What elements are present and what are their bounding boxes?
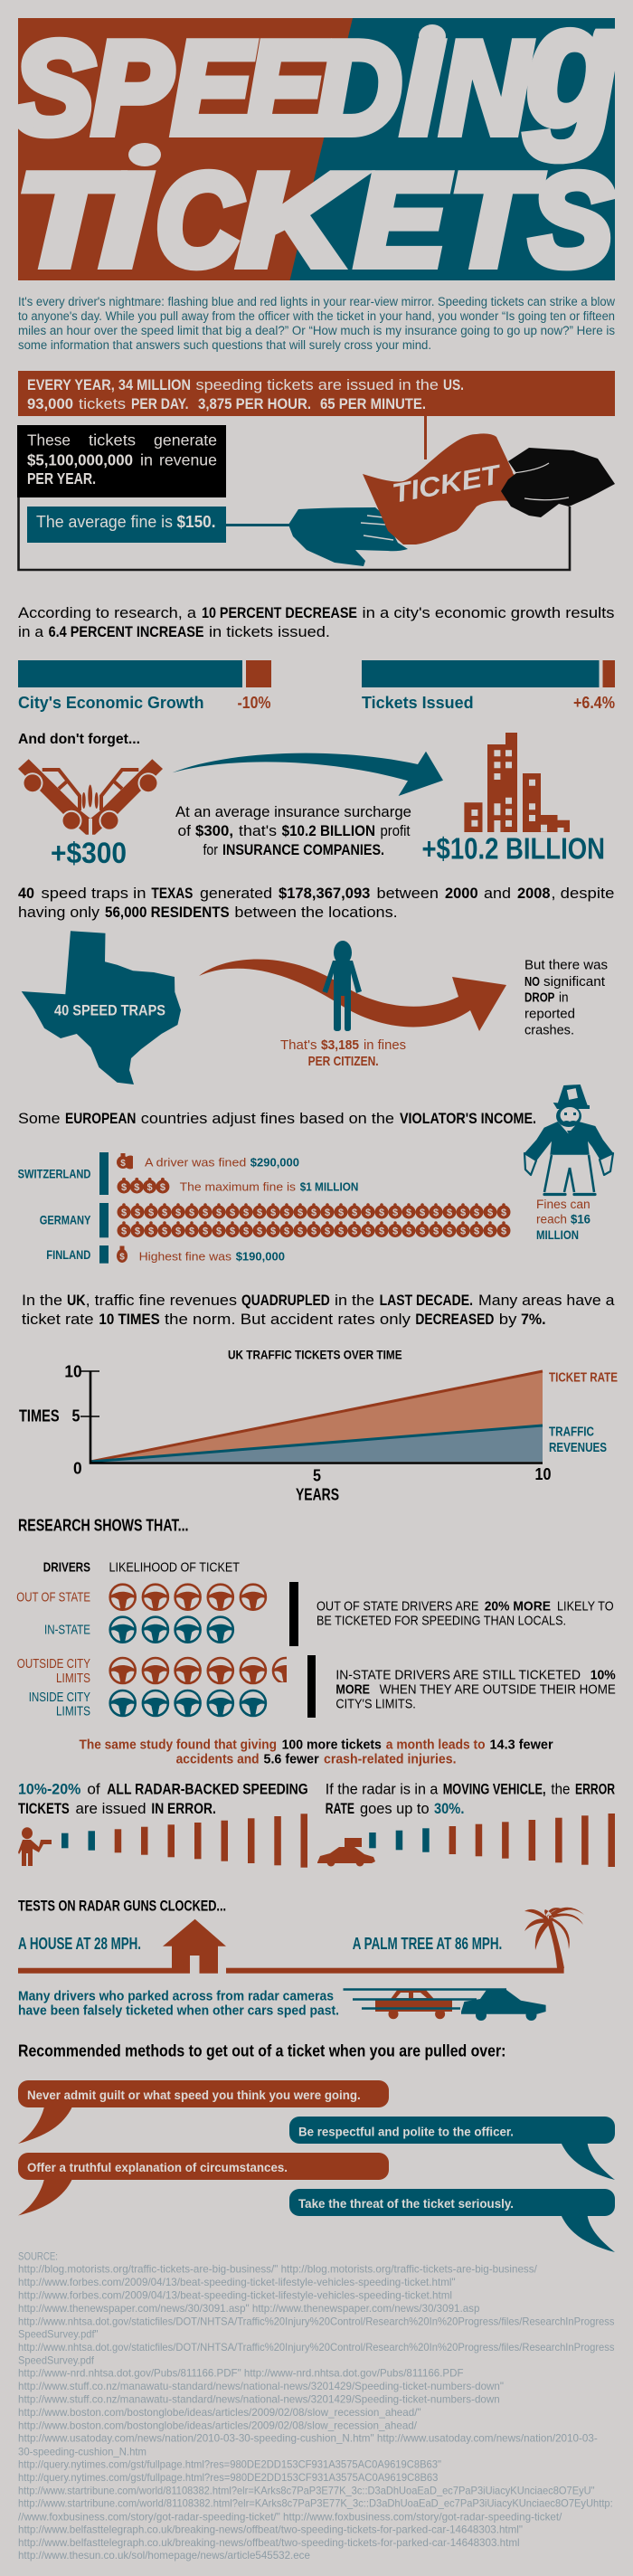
callout: same study: The same study found that giving <box>80 1738 277 1752</box>
stat bar: 34 million tickets: 65 PER MINUTE. <box>320 395 426 412</box>
revenue box: PER YEAR. <box>27 469 96 488</box>
uk statement: 7%. <box>521 1311 546 1328</box>
source list: http://www.usatoday.com/news/nation/2010-03-30-speeding-cushion_N.htm" http://www.usatoday.com/news/nation/2010-03- <box>18 2432 598 2445</box>
texas statement: speed traps in <box>42 885 146 902</box>
source list: http://www.belfasttelegraph.co.uk/breaking-news/offbeat/two-speeding-tickets-for-parked-car-14648303.html <box>18 2536 520 2549</box>
outline frame around revenue boxes <box>18 497 570 570</box>
title banner: E <box>172 14 255 161</box>
texas statement: $178,367,093 <box>279 885 370 902</box>
note: in-state drivers: 10% <box>590 1668 616 1683</box>
source list: http://www.thenewspaper.com/news/30/3091.asp" http://www.thenewspaper.com/news/30/3091.asp <box>18 2302 480 2315</box>
source list: http://query.nytimes.com/gst/fullpage.html?res=980DE2DD153CF931A3575AC0A9619C8B63 <box>18 2471 439 2484</box>
note: fines can reach $16 million: $16 <box>571 1213 590 1226</box>
insurance text: At an average insurance surcharge <box>175 803 411 820</box>
title banner: D <box>316 14 402 161</box>
note: out of state drivers: BE TICKETED FOR SPEEDING THAN LOCALS. <box>316 1614 566 1629</box>
speech bubble: take the threat seriously <box>289 2189 615 2252</box>
source list: http://www.stuff.co.nz/manawatu-standard/news/national-news/3201429/Speeding-ticket-numbers-down" <box>18 2380 504 2392</box>
title banner: N <box>440 14 532 161</box>
label: switzerland: A driver was fined <box>145 1155 246 1169</box>
label: switzerland: SWITZERLAND <box>18 1167 90 1181</box>
note: out of state drivers <box>289 1582 614 1646</box>
icon: citizen figure <box>322 941 362 1031</box>
source list: http://www.startribune.com/world/81108382.html?elr=KArks8c7PaP3E77K_3c::D3aDhUoaEaD_ec7PaP3iUiacyKUnciaec8O7EyU" <box>18 2484 595 2496</box>
heading: and don't forget: And don't forget... <box>18 732 140 747</box>
title banner: K <box>238 147 361 293</box>
note: in-state drivers: CITY'S LIMITS. <box>335 1697 416 1712</box>
title banner: I <box>402 14 442 161</box>
callout: same study: a month leads to <box>386 1738 486 1752</box>
intro paragraph: to anyone's day. While you pull away from the officer with the ticket in your hand, you wonder “Is going ten or fifteen <box>18 309 615 323</box>
stat bar: 34 million tickets: speeding tickets are issued in the <box>195 376 439 393</box>
pictogram chart: likelihood of ticket: INSIDE CITY <box>29 1690 90 1705</box>
radar error statement <box>18 1780 308 1817</box>
falsely ticketed text <box>18 1989 339 2019</box>
source list: http://www.stuff.co.nz/manawatu-standard/news/national-news/3201429/Speeding-ticket-numbers-down <box>18 2393 500 2406</box>
uk statement: ticket rate <box>22 1311 94 1328</box>
label: germany <box>40 1203 520 1237</box>
pictogram chart: likelihood of ticket: OUT OF STATE <box>16 1590 90 1605</box>
note: in-state drivers: IN-STATE DRIVERS ARE STILL TICKETED <box>335 1668 581 1683</box>
area chart: uk traffic tickets over time: TICKET RATE <box>549 1370 618 1385</box>
note: fines can reach $16 million: Fines can <box>536 1198 590 1211</box>
title banner: I <box>101 147 149 293</box>
research statement: 10 PERCENT DECREASE <box>202 604 357 621</box>
uk statement: LAST DECADE. <box>380 1292 473 1309</box>
insurance text: of <box>177 822 191 839</box>
source list: SpeedSurvey.pdf" <box>18 2328 98 2341</box>
label: switzerland: $$$$ <box>121 1182 165 1193</box>
icon: texas map <box>22 931 181 1084</box>
speech bubble: truthful explanation <box>18 2153 389 2216</box>
icon: ticket <box>363 433 527 545</box>
callout: same study: crash-related injuries. <box>324 1752 456 1766</box>
source list: http://www-nrd.nhtsa.dot.gov/Pubs/811166.PDF" http://www-nrd.nhtsa.dot.gov/Pubs/811166.PDF <box>18 2367 463 2380</box>
uk statement: , traffic fine revenues <box>86 1292 237 1309</box>
icon: engine <box>18 759 163 835</box>
texas statement: and <box>484 885 511 902</box>
insurance text <box>175 803 411 858</box>
connector: fine box to hand <box>226 524 291 526</box>
crash drop note <box>524 958 608 1038</box>
icon: black hand holding ticket <box>501 448 615 517</box>
per citizen text: in fines <box>364 1037 406 1053</box>
title banner: P <box>92 14 172 161</box>
icon: ticket: TICKET <box>390 459 505 509</box>
average fine box: The average fine is <box>36 512 173 531</box>
pictogram chart: likelihood of ticket: LIMITS <box>56 1671 90 1686</box>
per citizen text: PER CITIZEN. <box>308 1054 379 1069</box>
crash drop note: But there was <box>524 958 608 973</box>
crash drop note: in <box>559 990 569 1006</box>
callout: same study: 14.3 fewer <box>490 1738 553 1752</box>
label: a palm tree at 86 mph: A PALM TREE AT 86 MPH. <box>353 1935 502 1953</box>
uk statement: DECREASED <box>415 1311 494 1328</box>
source list: SpeedSurvey.pdf <box>18 2353 95 2366</box>
pictogram chart: likelihood of ticket: LIMITS <box>56 1704 90 1719</box>
source list: http://www.boston.com/bostonglobe/ideas/articles/2009/02/08/slow_recession_ahead/" <box>18 2406 421 2419</box>
intro paragraph: some information that answers such questions that will surely cross your mind. <box>18 338 431 352</box>
label: switzerland: The maximum fine is <box>180 1179 297 1193</box>
radar error statement: of <box>87 1780 100 1797</box>
note: out of state drivers: OUT OF STATE DRIVERS ARE <box>316 1599 479 1615</box>
research statement: in a city's economic growth results <box>362 604 615 621</box>
title banner: E <box>246 14 327 161</box>
title banner: S <box>530 147 613 293</box>
radar bars: moving vehicle <box>369 1814 615 1867</box>
bar: city's economic growth: City's Economic Growth <box>18 694 204 712</box>
falsely ticketed text: Many drivers who parked across from radar cameras <box>18 1989 334 2004</box>
moving vehicle statement: ERROR <box>575 1780 615 1797</box>
research statement <box>18 604 615 640</box>
icon: officer with radar gun <box>18 1827 52 1866</box>
revenue box: generate <box>154 431 217 450</box>
source list: SOURCE: <box>18 2250 58 2263</box>
research statement: 6.4 PERCENT INCREASE <box>49 623 204 640</box>
label: germany: $$$$$$$$$$$$$$$$$$$$$$$$$$$$$$ <box>121 1208 520 1218</box>
pictogram chart: likelihood of ticket: DRIVERS <box>43 1560 90 1576</box>
uk statement: 10 TIMES <box>99 1311 160 1328</box>
source list: http://www.forbes.com/2009/04/13/beat-speeding-ticket-lifestyle-vehicles-speeding-ticket.html" <box>18 2276 456 2288</box>
icon: teal hand receiving ticket <box>288 507 408 566</box>
label: switzerland: $1 MILLION <box>300 1179 358 1193</box>
title banner <box>18 18 615 280</box>
texas statement: between the locations. <box>234 904 398 921</box>
label: finland: $190,000 <box>236 1249 285 1263</box>
icon: palm tree on ground <box>226 1908 584 1974</box>
pictogram chart: likelihood of ticket: LIKELIHOOD OF TICKET <box>109 1560 240 1576</box>
uk statement <box>22 1292 615 1328</box>
insurance text: that's <box>239 822 277 839</box>
note: out of state drivers: LIKELY TO <box>557 1599 614 1615</box>
callout: same study <box>80 1738 553 1766</box>
area chart: uk traffic tickets over time <box>19 1347 618 1503</box>
pictogram chart: likelihood of ticket <box>16 1560 298 1719</box>
crash drop note: DROP <box>524 990 554 1006</box>
area chart: uk traffic tickets over time: TIMES <box>19 1407 60 1425</box>
speech bubble: never admit guilt: Never admit guilt or what speed you think you were going. <box>27 2088 361 2102</box>
bar: tickets issued <box>362 660 615 712</box>
label: germany: GERMANY <box>40 1212 91 1226</box>
area chart: uk traffic tickets over time: 10 <box>535 1465 552 1483</box>
insurance text: $10.2 BILLION <box>282 822 375 839</box>
revenue box: $5,100,000,000 <box>27 450 133 469</box>
moving vehicle statement: RATE <box>326 1800 354 1817</box>
source list: http://www.forbes.com/2009/04/13/beat-speeding-ticket-lifestyle-vehicles-speeding-ticket.html <box>18 2289 452 2302</box>
europe fines chart <box>18 1152 520 1264</box>
title banner: T <box>16 147 121 293</box>
area chart: uk traffic tickets over time: 5 <box>313 1466 321 1484</box>
texas statement: 2008 <box>517 885 550 902</box>
per citizen text: $3,185 <box>321 1037 359 1053</box>
stat bar: 34 million tickets: 3,875 PER HOUR. <box>198 395 311 412</box>
moving vehicle statement <box>326 1780 615 1817</box>
uk statement: In the <box>22 1292 62 1309</box>
revenue box: in <box>140 450 153 469</box>
area chart: uk traffic tickets over time: UK TRAFFIC TICKETS OVER TIME <box>228 1347 402 1361</box>
speech bubble: never admit guilt <box>18 2080 389 2144</box>
research statement: in tickets issued. <box>209 623 330 640</box>
crash drop note: significant <box>543 974 606 990</box>
label: finland <box>46 1245 285 1264</box>
research statement: According to research, a <box>18 604 197 621</box>
title banner: S <box>13 14 94 161</box>
texas statement: TEXAS <box>151 885 193 902</box>
crash drop note: reported <box>524 1007 575 1022</box>
europe statement: Some <box>18 1110 60 1127</box>
icon: car with radar <box>317 1838 375 1867</box>
icon: texas map: 40 SPEED TRAPS <box>54 1001 165 1018</box>
heading: research shows: RESEARCH SHOWS THAT... <box>18 1516 188 1534</box>
revenue box <box>17 425 226 497</box>
per citizen text <box>280 1037 406 1069</box>
heading: tests on radar guns: TESTS ON RADAR GUNS CLOCKED... <box>18 1898 226 1915</box>
stat bar: 34 million tickets: 93,000 <box>27 395 73 412</box>
uk statement: the norm. But accident rates only <box>165 1311 411 1328</box>
note: fines can reach $16 million: reach <box>536 1213 567 1226</box>
speech bubble: be respectful <box>289 2117 615 2180</box>
bar: tickets issued: Tickets Issued <box>362 694 474 712</box>
europe statement: EUROPEAN <box>65 1110 136 1127</box>
area chart: uk traffic tickets over time: 5 <box>72 1407 80 1425</box>
moving vehicle statement: MOVING VEHICLE, <box>443 1780 546 1797</box>
note: in-state drivers: MORE <box>335 1682 370 1698</box>
europe statement: countries adjust fines based on the <box>141 1110 394 1127</box>
radar error statement: are issued <box>76 1800 146 1817</box>
crash drop note: NO <box>524 974 540 990</box>
radar bars: person <box>61 1814 307 1868</box>
pictogram chart: likelihood of ticket: OUTSIDE CITY <box>17 1656 90 1672</box>
title banner: E <box>355 147 449 293</box>
stat bar: 34 million tickets: US. <box>443 376 464 393</box>
callout: same study: accidents and <box>176 1752 260 1766</box>
label: switzerland: $ <box>120 1159 126 1169</box>
moving vehicle statement: 30%. <box>434 1800 464 1817</box>
area chart: uk traffic tickets over time: TRAFFIC <box>549 1425 594 1439</box>
moving vehicle statement: goes up to <box>360 1800 430 1817</box>
connector: bar to ticket <box>424 416 427 459</box>
speech bubble: take the threat seriously: Take the threat of the ticket seriously. <box>298 2196 514 2211</box>
revenue box: tickets <box>89 431 136 450</box>
area chart: uk traffic tickets over time: REVENUES <box>549 1441 607 1455</box>
uk statement: in the <box>335 1292 374 1309</box>
area chart: uk traffic tickets over time: YEARS <box>296 1485 339 1503</box>
intro paragraph: It's every driver's nightmare: flashing blue and red lights in your rear-view mirror. Speeding tickets can strike a blow <box>18 295 615 308</box>
source list: http://query.nytimes.com/gst/fullpage.html?res=980DE2DD153CF931A3575AC0A9619C8B63" <box>18 2458 441 2471</box>
source list: http://www.belfasttelegraph.co.uk/breaking-news/offbeat/two-speeding-tickets-for-parked-car-14648303.html" <box>18 2524 523 2536</box>
stat bar: 34 million tickets: tickets <box>79 395 126 412</box>
label: finland: $ <box>119 1252 125 1263</box>
research statement: in a <box>18 623 44 640</box>
falsely ticketed text: have been falsely ticketed when other cars sped past. <box>18 2003 339 2019</box>
intro paragraph <box>18 295 615 352</box>
heading: recommended methods: Recommended methods to get out of a ticket when you are pulled over: <box>18 2041 505 2060</box>
pictogram chart: likelihood of ticket: IN-STATE <box>44 1623 90 1638</box>
arrow: surcharge to billions <box>173 752 443 796</box>
note: fines can reach $16 million: MILLION <box>536 1228 579 1242</box>
insurance text: $300, <box>195 822 233 839</box>
label: a house at 28 mph: A HOUSE AT 28 MPH. <box>18 1935 141 1953</box>
source list: //www.foxbusiness.com/story/got-radar-speeding-ticket/" http://www.foxbusiness.com/story/got-radar-speeding-ticket/ <box>18 2510 562 2523</box>
note: fines can reach $16 million <box>536 1198 590 1242</box>
bar: city's economic growth <box>18 660 271 712</box>
texas statement: 2000 <box>445 885 478 902</box>
insurance text: profit <box>380 822 411 839</box>
bar: city's economic growth: -10% <box>237 694 271 712</box>
speech bubble: truthful explanation: Offer a truthful explanation of circumstances. <box>27 2160 288 2174</box>
title banner: C <box>156 147 242 293</box>
average fine box <box>27 507 226 543</box>
radar error statement: ALL RADAR-BACKED SPEEDING <box>107 1780 308 1797</box>
insurance text: INSURANCE COMPANIES. <box>222 841 384 858</box>
uk statement: Many areas have a <box>478 1292 615 1309</box>
speech bubble: be respectful: Be respectful and polite to the officer. <box>298 2124 514 2138</box>
radar error statement: IN ERROR. <box>151 1800 216 1817</box>
texas statement <box>18 885 614 921</box>
callout: same study: 100 more tickets <box>282 1738 382 1752</box>
uk statement: UK <box>67 1292 86 1309</box>
icon: rich man with empty pockets <box>524 1084 613 1194</box>
moving vehicle statement: the <box>551 1780 570 1797</box>
note: out of state drivers: 20% MORE <box>485 1599 551 1615</box>
label: +$300: +$300 <box>51 837 127 869</box>
radar error statement: TICKETS <box>18 1800 70 1817</box>
source list: http://www.thesun.co.uk/sol/homepage/news/article545532.ece <box>18 2549 310 2562</box>
title banner: T <box>449 147 543 293</box>
moving vehicle statement: If the radar is in a <box>326 1780 439 1797</box>
intro paragraph: miles an hour over the speed limit that big a deal?” Or “How much is my insurance going to go up now?” Here is <box>18 324 615 337</box>
texas statement: between <box>376 885 439 902</box>
source list: http://blog.motorists.org/traffic-tickets-are-big-business/" http://blog.motorists.org/traffic-tickets-are-big-business/ <box>18 2263 537 2276</box>
label: switzerland: $290,000 <box>250 1155 299 1169</box>
texas statement: having only <box>18 904 100 921</box>
radar error statement: 10%-20% <box>18 1780 80 1797</box>
area chart: uk traffic tickets over time: 0 <box>73 1459 82 1477</box>
label: germany: $$$$$$$$$$$$$$$$$$$$$$$$$$$$$$ <box>121 1226 520 1237</box>
stat bar: 34 million tickets: PER DAY. <box>131 395 188 412</box>
icon: office buildings <box>464 733 570 832</box>
area chart: uk traffic tickets over time: 10 <box>64 1363 82 1381</box>
europe statement: VIOLATOR'S INCOME. <box>400 1110 536 1127</box>
uk statement: by <box>499 1311 517 1328</box>
revenue box: These <box>27 431 71 450</box>
stat bar: 34 million tickets <box>18 371 615 416</box>
texas statement: , despite <box>551 885 614 902</box>
callout: same study: 5.6 fewer <box>264 1752 319 1766</box>
label: finland: FINLAND <box>46 1247 90 1262</box>
icon: house on ground <box>18 1919 226 1974</box>
label: finland: Highest fine was <box>139 1249 232 1263</box>
revenue box: revenue <box>159 450 217 469</box>
source list: http://www.boston.com/bostonglobe/ideas/articles/2009/02/08/slow_recession_ahead/ <box>18 2419 418 2431</box>
texas statement: generated <box>200 885 272 902</box>
stat bar: 34 million tickets: EVERY YEAR, 34 MILLION <box>27 376 191 393</box>
icon: parked and passing cars <box>344 1989 546 2021</box>
source list <box>18 2250 615 2562</box>
bar: tickets issued: +6.4% <box>573 694 615 712</box>
texas statement: 56,000 RESIDENTS <box>105 904 230 921</box>
average fine box: $150. <box>177 512 215 531</box>
note: in-state drivers <box>307 1655 616 1718</box>
per citizen text: That's <box>280 1037 316 1053</box>
texas statement: 40 <box>18 885 34 902</box>
arrow: wave <box>199 959 506 1031</box>
uk statement: QUADRUPLED <box>241 1292 330 1309</box>
label: switzerland <box>18 1152 358 1195</box>
insurance text: for <box>203 841 218 858</box>
crash drop note: crashes. <box>524 1023 574 1038</box>
source list: 30-speeding-cushion_N.htm <box>18 2445 146 2458</box>
